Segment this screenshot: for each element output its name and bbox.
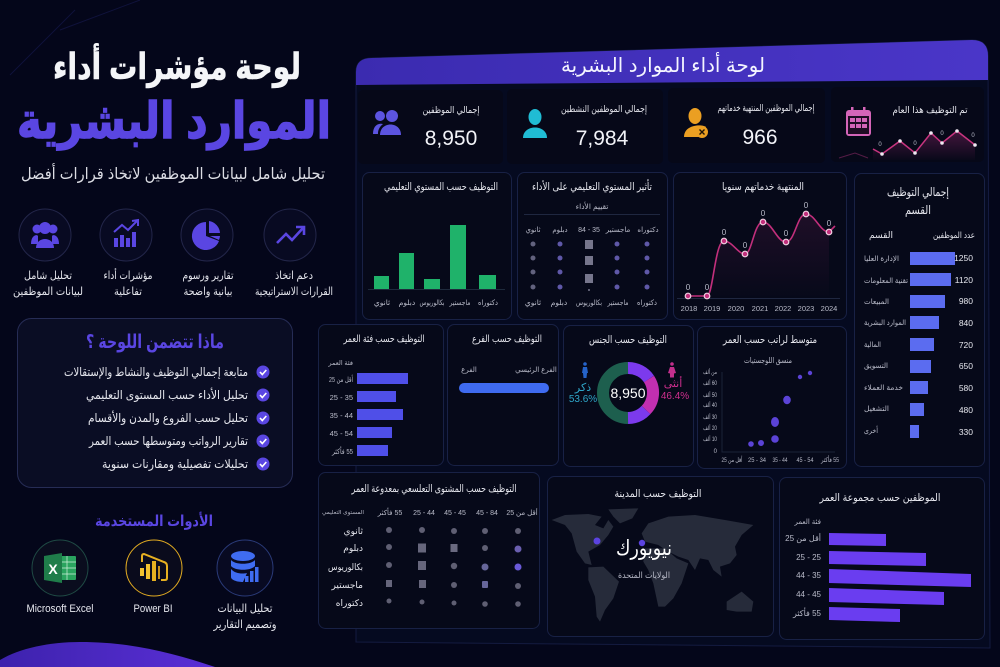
department values: 580 [959, 383, 973, 393]
age group labels [785, 533, 822, 618]
matrix row labels [328, 526, 363, 608]
panel: hiring by education level [362, 172, 512, 320]
column headers: 35 - 84 [578, 227, 600, 234]
KPI: active employees [507, 89, 663, 164]
row labels: دكتوراه [637, 298, 657, 307]
line chart: 0 [784, 229, 789, 238]
panel: total hiring by department: القسم [869, 230, 893, 241]
dashboard header [356, 40, 988, 85]
bar labels [374, 298, 498, 307]
donut chart: 8,950 [610, 385, 646, 401]
matrix headers [322, 507, 538, 517]
sparkline: 0 [971, 133, 975, 139]
tool: Power BI [126, 540, 182, 615]
y axis labels: 30 ألف [703, 413, 718, 421]
sparkline [839, 129, 977, 160]
panel: education impact on performance: تأثير المستوي التعليمي على الأداء [532, 179, 652, 193]
panel: hiring by branch: الفرع [461, 367, 477, 374]
feature: reports and charts: تقارير ورسوم [182, 270, 234, 282]
feature: employee analysis: تحليل شامل [24, 270, 72, 282]
department labels: أخرى [864, 425, 878, 435]
department labels: الموارد البشرية [864, 318, 906, 327]
branch bar [459, 383, 549, 393]
bar labels: دكتوراه [478, 298, 498, 307]
tool: data analysis: تحليل البيانات [218, 603, 272, 615]
decorative wave [0, 642, 215, 667]
year axis: 2023 [798, 304, 814, 313]
heading: tools: الأدوات المستخدمة [95, 512, 213, 530]
icon: trend arrow [277, 227, 304, 243]
row labels: ثانوي [525, 298, 541, 307]
icon: Power BI [140, 554, 167, 581]
map markers [594, 538, 645, 546]
column headers: ماجستير [605, 227, 631, 234]
icon: person teal [523, 109, 547, 138]
world map [552, 508, 753, 622]
title: لوحة مؤشرات أداء [53, 43, 301, 88]
feature: KPIs: مؤشرات أداء [104, 268, 153, 282]
panel: average salary by age [698, 326, 846, 468]
panel: average salary by age: منسق اللوجستيات [744, 356, 792, 365]
department labels: المبيعات [864, 297, 889, 306]
panel: hiring by gender [564, 326, 694, 466]
feature: employee analysis [13, 209, 83, 298]
age group labels: أقل من 25 [785, 533, 821, 543]
dashboard header: لوحة أداء الموارد البشرية [561, 52, 765, 77]
matrix row labels: دكتوراه [336, 598, 363, 608]
KPI: total employees: 8,950 [425, 127, 477, 150]
line chart: 0 [827, 219, 832, 228]
KPI: active employees: إجمالي الموظفين النشطين [561, 104, 647, 115]
matrix headers: 44 - 25 [413, 510, 435, 517]
feature: KPIs: تفاعلية [114, 286, 142, 298]
row labels [525, 298, 657, 307]
female legend: 46.4% [661, 391, 689, 402]
sparkline: 0 [878, 142, 882, 148]
feature: employee analysis: لبيانات الموظفين [13, 286, 83, 298]
panel: hiring by education and age group [318, 472, 540, 628]
panel: hiring by branch [448, 324, 558, 466]
line chart: 0 [761, 209, 766, 218]
panel: hiring by branch: الفرع الرئيسي [515, 367, 557, 374]
panel: hiring by gender: التوظيف حسب الجنس [589, 334, 667, 346]
year axis: 2024 [821, 304, 837, 313]
y axis labels: 40 ألف [703, 401, 718, 409]
icon: pie chart [192, 221, 220, 250]
matrix row labels: بكالوريوس [328, 562, 363, 572]
KPI: active employees: 7,984 [576, 127, 629, 150]
year axis: 2020 [728, 304, 744, 313]
department values: 1250 [954, 253, 973, 263]
department values: 840 [959, 318, 973, 328]
tool: data analysis: وتصميم التقارير [213, 619, 276, 632]
feature: decision support: دعم اتخاذ [275, 270, 313, 282]
department labels [864, 254, 908, 435]
department values: 650 [959, 361, 973, 371]
line chart: 0 [743, 241, 748, 250]
line chart [677, 201, 840, 299]
KPI: hired this year: تم التوظيف هذا العام [892, 105, 968, 116]
panel: hiring by education level: التوظيف حسب المستوي التعليمي [384, 181, 498, 193]
sparkline: 0 [913, 141, 917, 147]
tool: Excel: Microsoft Excel [26, 603, 94, 615]
panel: total hiring by department: إجمالي التوظيف [887, 185, 949, 200]
x axis labels: 54 - 45 [796, 457, 814, 464]
y axis labels: 60 ألف [703, 379, 718, 387]
department labels: المالية [864, 340, 881, 349]
column headers: دكتوراه [637, 226, 659, 234]
age group labels: 55 فأكثر [792, 607, 822, 618]
feature: reports and charts: بيانية واضحة [184, 286, 232, 298]
panel: employees by age group [780, 478, 984, 640]
department values: 720 [959, 340, 973, 350]
icon: Excel: X [48, 561, 58, 577]
panel: hiring by age bracket: فئة العمر [327, 360, 353, 367]
age labels: 25 - 35 [330, 393, 353, 402]
matrix row labels: ثانوي [344, 526, 363, 536]
department values: 480 [959, 405, 973, 415]
bar labels: بكالوريوس [420, 298, 444, 307]
bar labels: ثانوي [374, 298, 390, 307]
line chart: 0 [722, 228, 727, 237]
panel: employees by age group: الموظفين حسب مجموعة العمر [819, 492, 940, 504]
department labels: التشغيل [864, 404, 889, 413]
line chart: 0 [705, 283, 710, 292]
row labels: بكالوريوس [576, 298, 602, 307]
panel: hiring by city map [548, 476, 774, 636]
panel: education impact on performance: تقييم الأداء [576, 201, 608, 211]
checklist: تحليل حسب الفروع والمدن والأقسام [88, 410, 248, 426]
panel: hiring by city map: نيويورك [616, 537, 672, 560]
matrix headers: 55 فأكثر [377, 507, 402, 517]
KPI: terminated employees [668, 88, 825, 163]
icon: people [373, 110, 401, 135]
title [17, 43, 331, 151]
column headers [525, 226, 659, 234]
KPI: terminated employees: إجمالي الموظفين المنتهية خدماتهم [718, 103, 815, 114]
department labels: خدمة العملاء [864, 383, 903, 392]
y axis labels: من ألف [703, 368, 717, 376]
male legend: ذكر [574, 382, 591, 394]
checklist: تحليل الأداء حسب المستوى التعليمي [86, 387, 248, 403]
age group labels: 45 - 44 [796, 590, 822, 599]
matrix headers: أقل من 25 [506, 508, 538, 517]
column headers: دبلوم [552, 227, 568, 234]
year axis: 2019 [704, 304, 720, 313]
panel: employees by age group: فئة العمر [793, 519, 821, 526]
checklist: تحليلات تفصيلية ومقارنات سنوية [102, 457, 248, 472]
tool: Power BI: Power BI [134, 603, 172, 615]
KPI: hired this year [831, 87, 984, 162]
male legend: 53.6% [569, 394, 597, 405]
feature: decision support: القرارات الاستراتيجية [255, 286, 333, 298]
y axis labels: 0 [714, 449, 718, 455]
age labels [329, 374, 353, 456]
year axis: 2018 [681, 304, 697, 313]
feature: decision support [255, 209, 333, 298]
panel: total hiring by department: عدد الموظفين [933, 230, 975, 240]
bar labels: دبلوم [399, 298, 415, 307]
dot matrix [530, 240, 650, 291]
department labels: تقنية المعلومات [864, 276, 908, 285]
panel: hiring by city map: الولايات المتحدة [618, 570, 670, 580]
column headers: ثانوي [525, 227, 541, 234]
male legend [569, 362, 597, 405]
KPI: terminated employees: 966 [742, 126, 778, 149]
panel: dashboard contents [18, 318, 292, 488]
age labels: 35 - 44 [330, 411, 353, 420]
matrix cells [386, 527, 522, 607]
checklist [64, 365, 270, 472]
dashboard frame [356, 40, 990, 648]
y axis labels [703, 368, 718, 455]
heading: ماذا تتضمن اللوحة ؟ [86, 332, 224, 353]
x axis labels [722, 455, 839, 464]
icon: bars and arrow [114, 220, 138, 247]
sparkline: 0 [940, 131, 944, 137]
matrix headers: المستوى التعليمي [322, 510, 364, 516]
panel: terminated per year line chart [674, 172, 846, 320]
panel: average salary by age: متوسط لراتب حسب العمر [722, 334, 817, 346]
panel: total hiring by department [854, 174, 984, 466]
department values: 980 [959, 296, 973, 306]
panel: education impact on performance [518, 172, 668, 320]
icon: person with x [684, 108, 708, 138]
x axis labels: 44 - 35 [772, 457, 788, 464]
panel: hiring by education and age group: التوظيف حسب المشتوى التعلسعي بمعدوعة العمر [351, 483, 516, 495]
department labels: التسويق [864, 361, 888, 370]
x axis labels: 55 فأكثر [820, 455, 839, 464]
feature: KPIs [100, 209, 153, 298]
icon: people [31, 222, 59, 248]
title: الموارد البشرية [17, 93, 331, 151]
donut chart [603, 368, 653, 418]
line chart: 0 [804, 201, 809, 210]
matrix row labels: دبلوم [343, 543, 363, 553]
panel: hiring by age bracket: التوظيف حسب فئة العمر [343, 334, 424, 345]
line chart: 0 [686, 283, 691, 292]
subtitle: تحليل شامل لبيانات الموظفين لاتخاذ قرارات أفضل [21, 163, 325, 184]
age group bars [829, 533, 971, 622]
panel: hiring by city map: التوظيف حسب المدينة [614, 488, 702, 500]
y axis labels: 20 ألف [703, 424, 718, 432]
age bars [357, 373, 408, 456]
female legend: أنثى [664, 376, 682, 390]
tool: data analysis [213, 540, 276, 632]
age labels: 45 - 54 [330, 429, 353, 438]
x axis labels: 34 - 25 [748, 457, 766, 464]
panel: hiring by branch: التوظيف حسب الفرع [472, 334, 542, 345]
year axis: 2021 [752, 304, 768, 313]
panel: hiring by age bracket [318, 324, 444, 466]
year axis: 2022 [775, 304, 791, 313]
KPI: total employees [358, 90, 503, 164]
panel: terminated per year line chart: المنتهية خدماتهم سنويا [722, 181, 804, 193]
panel: total hiring by department: القسم [905, 203, 931, 217]
y axis labels: 10 ألف [703, 435, 718, 443]
icon: database [231, 551, 258, 582]
icon: calendar [846, 107, 871, 136]
department bars [910, 252, 955, 438]
age labels: 55 فأكثر [331, 446, 353, 456]
bar labels: ماجستير [449, 298, 470, 307]
age labels: أقل من 25 [329, 374, 353, 384]
row labels: دبلوم [551, 298, 567, 307]
checklist: متابعة إجمالي التوظيف والنشاط والإستقالات [64, 365, 248, 380]
matrix headers: 45 - 45 [444, 510, 466, 517]
tool: Excel [26, 540, 94, 615]
x axis labels: أقل من 25 [722, 455, 743, 464]
checklist: تقارير الرواتب ومتوسطها حسب العمر [88, 434, 248, 449]
bubbles [748, 371, 812, 447]
feature: reports and charts [181, 209, 234, 298]
female legend [661, 362, 689, 402]
y axis labels: 50 ألف [703, 391, 718, 399]
row labels: ماجستير [607, 298, 628, 307]
KPI: total employees: إجمالي الموظفين [422, 105, 480, 116]
matrix headers: 84 - 45 [476, 510, 498, 517]
year axis [681, 304, 837, 313]
department values: 1120 [955, 275, 973, 285]
department values: 330 [959, 427, 973, 437]
department values [954, 253, 973, 437]
age group labels: 35 - 44 [796, 571, 822, 580]
age group labels: 25 - 25 [796, 553, 822, 562]
bar chart [368, 225, 505, 290]
department labels: الإدارة العليا [864, 254, 899, 263]
matrix row labels: ماجستير [330, 580, 363, 590]
